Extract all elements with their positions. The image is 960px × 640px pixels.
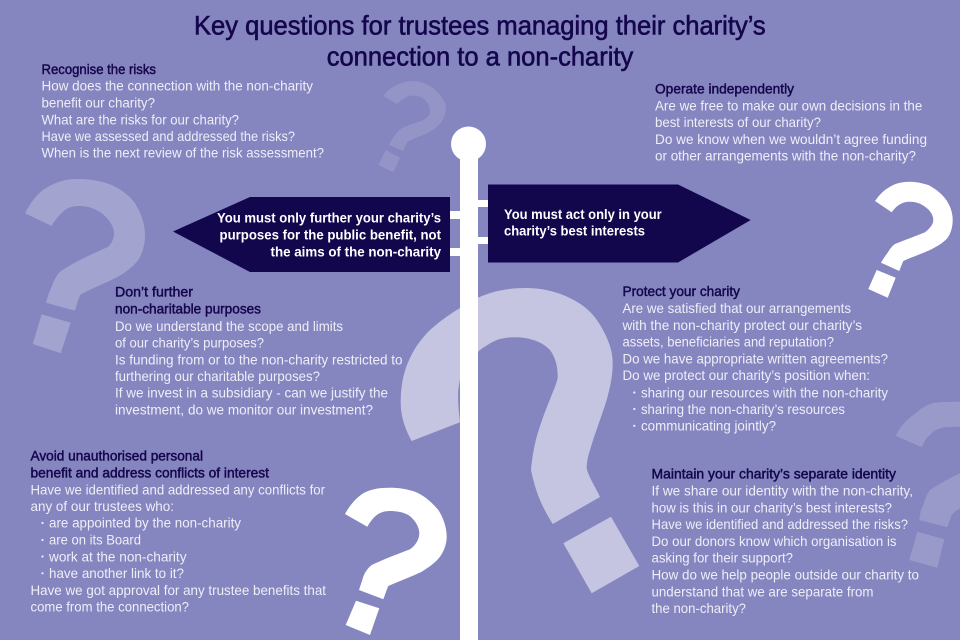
- text block: avoid unauthorised personal benefit: any of our trustees who:: [30, 498, 174, 514]
- text block: operate independently: Are we free to make our own decisions in the: [655, 97, 922, 113]
- text block: protect your charity: Protect your charity: [622, 283, 740, 299]
- text block: recognise the risks: Have we assessed and addressed the risks?: [42, 128, 295, 144]
- text block: operate independently: [655, 80, 927, 164]
- text block: maintain your charity's separate identity: the non-charity?: [652, 600, 746, 616]
- arrow sign: left: the aims of the non-charity: [270, 244, 441, 260]
- title: [194, 10, 766, 72]
- text block: avoid unauthorised personal benefit: work at the non-charity: [48, 548, 186, 564]
- text block: recognise the risks: When is the next review of the risk assessment?: [42, 145, 324, 161]
- text block: don't further non-charitable purposes: investment, do we monitor our investment?: [115, 402, 373, 418]
- text block: recognise the risks: [42, 61, 324, 161]
- text block: maintain your charity's separate identity: how is this in our charity’s best interests?: [652, 499, 892, 515]
- icon: large central question mark: [401, 288, 639, 593]
- text block: operate independently: or other arrangements with the non-charity?: [655, 148, 916, 164]
- text block: recognise the risks: benefit our charity?: [42, 95, 155, 111]
- text block: maintain your charity's separate identity: Have we identified and addressed the risks?: [652, 516, 908, 532]
- text block: don't further non-charitable purposes: [115, 284, 403, 418]
- icon: pale question mark left: [25, 179, 145, 353]
- text block: recognise the risks: Recognise the risks: [42, 61, 156, 77]
- arrow sign: left: You must only further your charity’s: [217, 210, 441, 226]
- arrow sign: right: [488, 184, 751, 262]
- text block: protect your charity: assets, beneficiaries and reputation?: [622, 334, 834, 350]
- arrow sign: right: You must act only in your: [504, 206, 662, 222]
- text block: protect your charity: with the non-charity protect our charity’s: [622, 317, 862, 333]
- text block: avoid unauthorised personal benefit: are appointed by the non-charity: [49, 515, 241, 531]
- text block: operate independently: Do we know when we wouldn’t agree funding: [655, 131, 927, 147]
- arrow sign: right: charity’s best interests: [504, 223, 645, 239]
- text block: avoid unauthorised personal benefit: Avoid unauthorised personal: [30, 448, 203, 464]
- icon: faint cropped question mark right edge: [896, 402, 960, 568]
- text block: don't further non-charitable purposes: of our charity’s purposes?: [115, 335, 264, 351]
- arrow sign: left: purposes for the public benefit, not: [220, 227, 441, 243]
- text block: don't further non-charitable purposes: Do we understand the scope and limits: [115, 318, 343, 334]
- text block: don't further non-charitable purposes: non-charitable purposes: [115, 301, 261, 317]
- text block: operate independently: Operate independently: [655, 80, 794, 96]
- text block: protect your charity: Are we satisfied that our arrangements: [622, 300, 851, 316]
- text block: avoid unauthorised personal benefit: benefit and address conflicts of interest: [30, 464, 269, 480]
- arrow sign: left: [173, 197, 450, 272]
- text block: don't further non-charitable purposes: Is funding from or to the non-charity restricted to: [115, 351, 403, 367]
- text block: protect your charity: Do we protect our charity’s position when:: [622, 367, 870, 383]
- title: connection to a non-charity: [327, 42, 634, 72]
- text block: maintain your charity's separate identity: How do we help people outside our charity to: [652, 567, 919, 583]
- text block: recognise the risks: What are the risks for our charity?: [42, 111, 239, 127]
- text block: don't further non-charitable purposes: Don’t further: [115, 284, 193, 300]
- signpost pole: [450, 126, 488, 640]
- text block: protect your charity: Do we have appropriate written agreements?: [622, 350, 888, 366]
- text block: avoid unauthorised personal benefit: [30, 448, 326, 615]
- icon: white question mark right: [868, 182, 953, 298]
- text block: maintain your charity's separate identity: Do our donors know which organisation is: [652, 533, 896, 549]
- text block: avoid unauthorised personal benefit: Have we got approval for any trustee benefits that: [30, 582, 326, 598]
- text block: avoid unauthorised personal benefit: have another link to it?: [49, 565, 184, 581]
- text block: recognise the risks: How does the connection with the non-charity: [42, 78, 313, 94]
- text block: maintain your charity's separate identity: asking for their support?: [652, 550, 793, 566]
- text block: protect your charity: sharing the non-charity’s resources: [641, 401, 845, 417]
- text block: maintain your charity's separate identity: understand that we are separate from: [652, 583, 874, 599]
- text block: protect your charity: sharing our resources with the non-charity: [641, 384, 888, 400]
- text block: protect your charity: [622, 283, 888, 434]
- icon: faint question mark top centre: [378, 81, 446, 172]
- icon: white question mark bottom centre-left: [345, 488, 447, 635]
- text block: maintain your charity's separate identity: Maintain your charity’s separate identity: [652, 466, 896, 482]
- text block: operate independently: best interests of our charity?: [655, 114, 821, 130]
- title: Key questions for trustees managing their charity’s: [194, 10, 766, 40]
- text block: maintain your charity's separate identity: If we share our identity with the non-charity,: [652, 483, 913, 499]
- text block: avoid unauthorised personal benefit: are on its Board: [49, 532, 141, 548]
- text block: protect your charity: communicating jointly?: [641, 418, 776, 434]
- text block: maintain your charity's separate identity: [652, 466, 919, 616]
- text block: avoid unauthorised personal benefit: come from the connection?: [30, 599, 189, 615]
- text block: don't further non-charitable purposes: furthering our charitable purposes?: [115, 368, 320, 384]
- text block: don't further non-charitable purposes: If we invest in a subsidiary - can we justify the: [115, 385, 388, 401]
- text block: avoid unauthorised personal benefit: Have we identified and addressed any conflicts for: [30, 481, 325, 497]
